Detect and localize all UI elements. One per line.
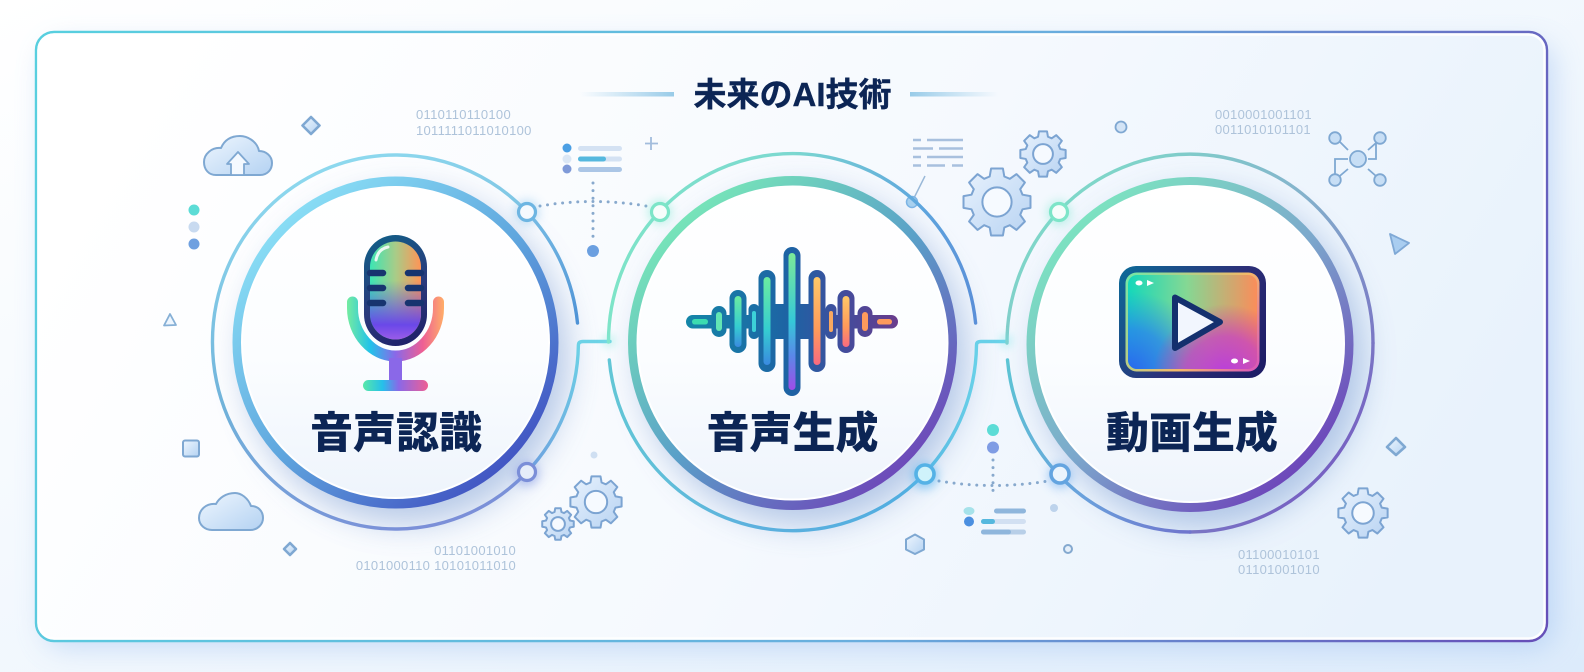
- list widget top: [562, 144, 622, 174]
- binary text top left: 1011111011010100: [416, 123, 532, 138]
- label: 音声認識: [310, 410, 482, 458]
- icon: triangle outline: [164, 314, 176, 326]
- connector glow: [604, 336, 614, 346]
- node top: [515, 200, 539, 224]
- icon: diamond right: [1387, 438, 1405, 455]
- small dot: [1050, 504, 1058, 512]
- icon: gear lower right: [1338, 488, 1388, 538]
- title: 未来のAI技術: [694, 76, 892, 113]
- icon: upload cloud: [204, 136, 272, 175]
- icon: text lines: [913, 140, 963, 166]
- icon: microphone: [352, 235, 438, 391]
- binary text top left: 0110110110100: [416, 107, 511, 122]
- icon: network: [1329, 132, 1386, 186]
- node bottom: [912, 463, 938, 489]
- ring shadow: [1038, 192, 1364, 528]
- node top: [648, 200, 672, 224]
- binary text bottom left: 0101000110 10101011010: [356, 558, 516, 573]
- binary text top right: 0011010101101: [1215, 122, 1311, 137]
- node bottom: [1048, 464, 1072, 488]
- binary text bottom right: [1238, 547, 1320, 577]
- circle: speech recognition: [212, 155, 610, 529]
- pointer with dot: [906, 176, 925, 208]
- icon: ring dot: [1116, 122, 1126, 132]
- icon: hexagon: [906, 534, 924, 554]
- disc: [242, 187, 549, 498]
- inner ring: [1032, 182, 1348, 507]
- dotted connector top: [540, 183, 646, 257]
- icon: small ring: [1064, 545, 1072, 553]
- icon: sound wave: [686, 247, 898, 396]
- icon: plus: [645, 137, 658, 150]
- binary text bottom left: 01101001010: [434, 543, 516, 558]
- decorative icons: left: [164, 107, 658, 573]
- icon: small diamond: [284, 543, 296, 555]
- connector glow: [1001, 336, 1011, 346]
- icon: cloud: [199, 493, 263, 530]
- outer ring: [608, 154, 1007, 531]
- status dots: [188, 204, 200, 250]
- binary text top left: [416, 107, 532, 138]
- icon: triangle: [1390, 234, 1409, 254]
- dotted connector bottom: [939, 424, 1048, 496]
- icon: small gear centre: [1020, 131, 1066, 177]
- icon: square: [183, 440, 199, 456]
- inner ring: [633, 181, 952, 505]
- label: 音声生成: [706, 409, 878, 458]
- outer ring: [212, 155, 610, 529]
- outer ring: [1007, 154, 1373, 532]
- ring shadow: [640, 191, 966, 525]
- circle: video generation: [1001, 154, 1373, 532]
- small dot: [590, 452, 598, 458]
- icon: large gear lower left: [570, 476, 622, 528]
- binary text bottom right: 01101001010: [1238, 562, 1320, 577]
- binary text top right: 0010001001101: [1215, 107, 1312, 122]
- node bottom: [515, 462, 539, 486]
- icon: diamond: [302, 117, 320, 134]
- icon: large gear centre: [964, 169, 1030, 235]
- icon: small gear lower left: [542, 508, 574, 540]
- list widget bottom: [964, 507, 1026, 534]
- circle: speech synthesis: [604, 154, 1007, 531]
- binary text bottom left: [356, 543, 516, 573]
- disc: [638, 186, 948, 500]
- title: [580, 76, 998, 113]
- ring shadow: [244, 192, 568, 524]
- inner ring: [238, 182, 554, 504]
- node top: [1047, 201, 1071, 225]
- label: 動画生成: [1106, 409, 1278, 458]
- binary text top right: [1215, 107, 1312, 137]
- binary text bottom right: 01100010101: [1238, 547, 1320, 562]
- icon: video player: [1119, 266, 1266, 378]
- decorative icons: centre and right: [906, 107, 1409, 577]
- disc: [1036, 186, 1344, 502]
